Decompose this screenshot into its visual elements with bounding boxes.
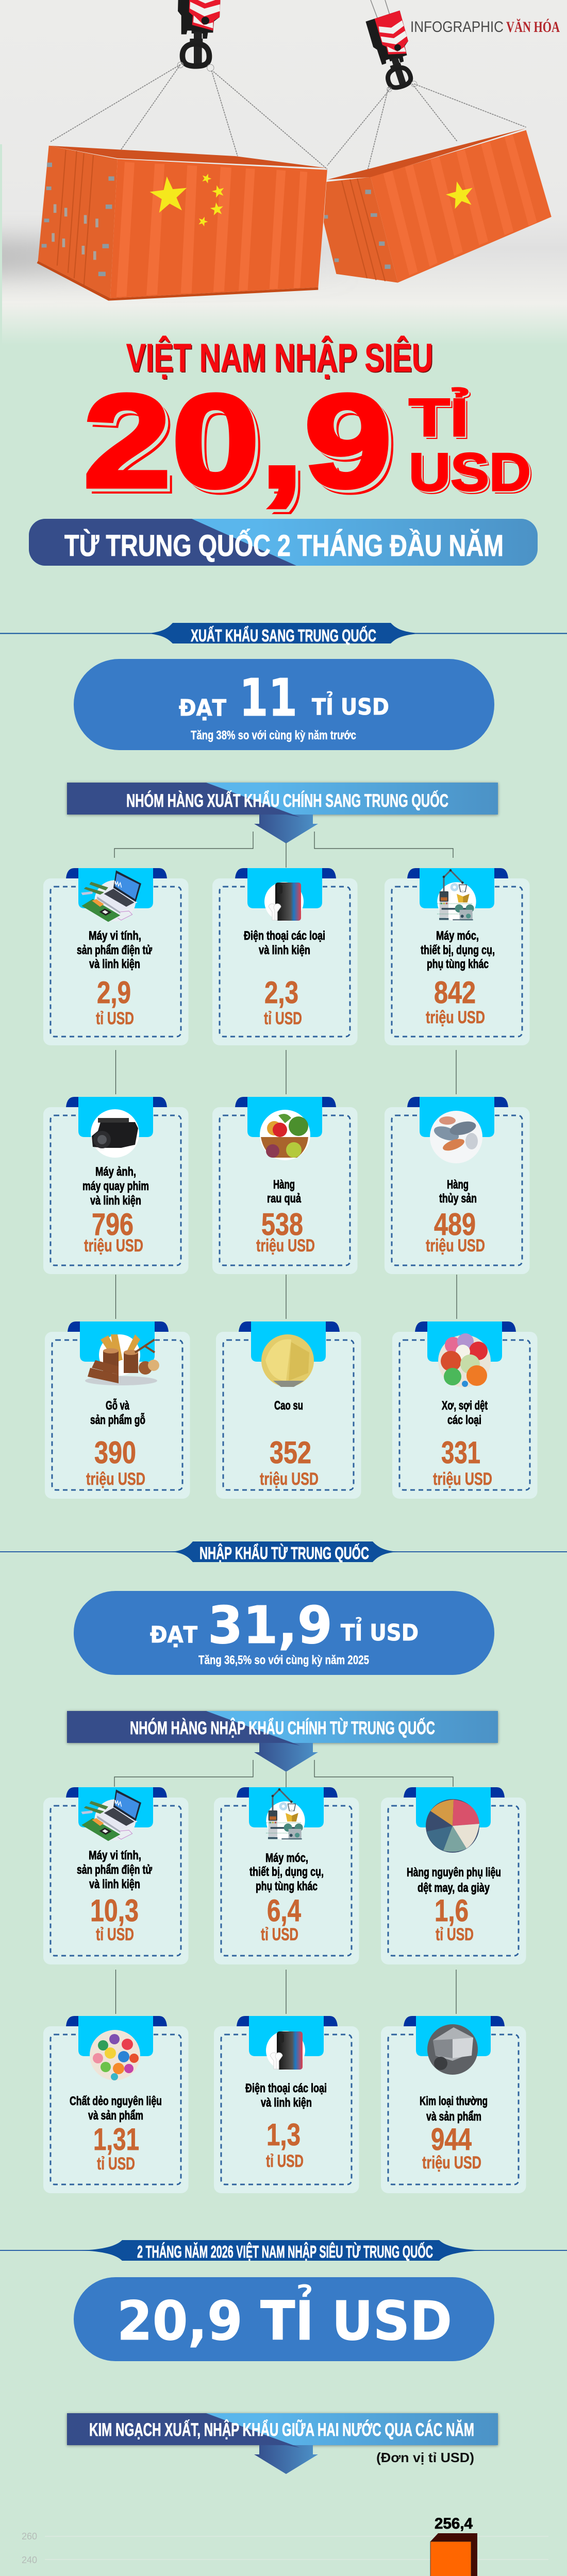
illustration: China flag container xyxy=(37,146,327,301)
connectors: export top xyxy=(114,832,457,1319)
card: computers: tỉ USD xyxy=(96,1009,134,1028)
card: machinery: 842 xyxy=(434,975,476,1010)
pill: import total: TỈ USD xyxy=(341,1617,419,1646)
card: cameras: máy quay phim xyxy=(82,1179,149,1193)
card: wood: triệu USD xyxy=(86,1469,145,1489)
card: textile fibre: 331 xyxy=(441,1435,480,1470)
icon: phone xyxy=(264,882,304,921)
card: vegetables and fruit xyxy=(212,1097,358,1274)
card: import phones: và linh kiện xyxy=(261,2096,312,2110)
card: import phones: Điện thoại các loại xyxy=(245,2081,327,2095)
card: computers xyxy=(43,868,189,1045)
card: import plastics: 1,31 xyxy=(93,2122,139,2157)
card: import textile materials: tỉ USD xyxy=(436,1925,474,1944)
bar chart: 260 xyxy=(22,2531,37,2541)
banner: subtitle xyxy=(29,519,538,566)
big unit TỈ USD: USD xyxy=(410,444,532,504)
card: seafood: Hàng xyxy=(447,1178,469,1192)
card: seafood: 489 xyxy=(434,1207,476,1242)
card: import metals: Kim loại thường xyxy=(420,2094,488,2108)
card: import computers: tỉ USD xyxy=(96,1925,134,1944)
card: computers: và linh kiện xyxy=(89,957,140,971)
card: import plastics xyxy=(43,2016,189,2193)
bar chart: 256,4 xyxy=(435,2515,473,2532)
icon: fruit basket xyxy=(260,1110,310,1160)
bar chart: 240 xyxy=(22,2555,37,2565)
icon: plastic beads xyxy=(90,2030,140,2080)
pill: export total: TỈ USD xyxy=(312,691,389,720)
card: import machinery xyxy=(214,1787,359,1964)
card: cameras: 796 xyxy=(92,1207,134,1242)
card: vegetables and fruit: rau quả xyxy=(267,1192,301,1206)
card: wood xyxy=(45,1321,190,1499)
card: phones: tỉ USD xyxy=(264,1009,302,1028)
card: vegetables and fruit: triệu USD xyxy=(256,1236,315,1256)
icon: wood logs xyxy=(85,1334,159,1385)
icon: yarn balls xyxy=(438,1333,491,1387)
pill: import total: 31,9 xyxy=(208,1595,332,1655)
card: textile fibre: triệu USD xyxy=(433,1469,492,1489)
card: rubber: Cao su xyxy=(274,1399,303,1413)
card: computers: sản phẩm điện tử xyxy=(77,943,152,957)
card: import metals: và sản phẩm xyxy=(426,2110,481,2124)
card: machinery: thiết bị, dụng cụ, xyxy=(421,943,495,957)
card: phones: và linh kiện xyxy=(259,943,310,957)
section header: trade deficit xyxy=(0,2240,567,2261)
card: machinery: triệu USD xyxy=(426,1008,485,1027)
section header: import xyxy=(0,1541,567,1563)
card: machinery: phụ tùng khác xyxy=(427,957,489,971)
card: import phones: tỉ USD xyxy=(266,2151,304,2171)
card: cameras: triệu USD xyxy=(84,1236,143,1256)
icon: machine xyxy=(266,1788,305,1840)
heading bar: import groups: NHÓM HÀNG NHẬP KHẨU CHÍNH TỪ TRUNG QUỐC xyxy=(130,1718,435,1738)
card: import plastics: Chất dẻo nguyên liệu xyxy=(70,2094,162,2108)
icon: metal bars xyxy=(427,2024,478,2075)
card: import phones: 1,3 xyxy=(266,2117,301,2152)
icon: laptop xyxy=(81,1789,141,1841)
card: phones: 2,3 xyxy=(264,975,298,1010)
card: import machinery: phụ tùng khác xyxy=(256,1879,318,1893)
big unit TỈ USD: TỈ xyxy=(409,387,469,448)
card: import plastics: tỉ USD xyxy=(97,2154,135,2174)
icon: video camera xyxy=(91,1109,139,1158)
card: seafood: triệu USD xyxy=(426,1236,485,1256)
card: import computers: và linh kiện xyxy=(89,1877,140,1891)
card: import machinery: 6,4 xyxy=(267,1893,301,1928)
card: import metals: triệu USD xyxy=(422,2153,481,2173)
card: machinery: Máy móc, xyxy=(436,929,479,943)
icon: rubber xyxy=(261,1334,314,1387)
card: wood: sản phẩm gỗ xyxy=(90,1413,145,1427)
big number 20,9: 20,9 xyxy=(83,366,392,515)
section header: export: XUẤT KHẨU SANG TRUNG QUỐC xyxy=(191,625,376,645)
card: rubber xyxy=(216,1321,361,1499)
pill: export total: 11 xyxy=(239,668,297,728)
heading bar: import groups xyxy=(67,1711,498,1772)
section header: export xyxy=(0,623,567,645)
card: import textile materials: Hàng nguyên phụ liệu xyxy=(407,1866,501,1879)
card: wood: 390 xyxy=(94,1435,136,1470)
card: machinery xyxy=(385,868,530,1045)
icon: phone xyxy=(266,2031,305,2070)
card: phones xyxy=(212,868,358,1045)
card: import metals: 944 xyxy=(431,2122,472,2157)
chart unit note: (Đơn vị tỉ USD) xyxy=(376,2450,474,2465)
big number 20,9: 20,9 xyxy=(88,371,397,520)
card: import machinery: thiết bị, dụng cụ, xyxy=(249,1865,324,1879)
card: import phones xyxy=(214,2016,359,2193)
pill: export total xyxy=(74,659,494,750)
card: import textile materials xyxy=(381,1787,526,1964)
card: import metals xyxy=(381,2016,526,2193)
card: computers: Máy vi tính, xyxy=(89,929,141,943)
section header: import: NHẬP KHẨU TỪ TRUNG QUỐC xyxy=(199,1543,369,1563)
big unit TỈ USD: USD xyxy=(411,445,533,505)
card: import computers xyxy=(43,1787,189,1964)
card: import textile materials: dệt may, da giày xyxy=(418,1881,490,1895)
heading bar: export groups xyxy=(67,783,498,843)
icon: lifting chains xyxy=(51,63,526,173)
icon: left crane hook xyxy=(177,0,221,71)
big unit TỈ USD: TỈ xyxy=(411,390,471,450)
card: cameras: Máy ảnh, xyxy=(95,1165,136,1179)
card: import machinery: tỉ USD xyxy=(261,1925,298,1944)
logo top: INFOGRAPHIC xyxy=(410,19,504,36)
icon: right crane hook xyxy=(365,0,424,95)
big unit TỈ USD xyxy=(409,387,533,505)
title line: VIỆT NAM NHẬP SIÊU xyxy=(127,336,434,381)
pill: export total: Tăng 38% so với cùng kỳ năm trước xyxy=(191,728,356,742)
pill: import total: Tăng 36,5% so với cùng kỳ năm 2025 xyxy=(198,1653,369,1667)
pill: trade deficit xyxy=(74,2277,494,2361)
connectors: import xyxy=(114,1760,456,2014)
big unit TỈ USD: TỈ xyxy=(410,389,470,449)
card: cameras: và linh kiện xyxy=(90,1194,141,1208)
card: computers: 2,9 xyxy=(97,975,131,1010)
card: import textile materials: 1,6 xyxy=(435,1893,469,1928)
big unit TỈ USD: USD xyxy=(409,443,531,502)
card: import computers: 10,3 xyxy=(90,1893,139,1928)
icon: machine xyxy=(437,869,476,921)
card: seafood: thủy sản xyxy=(439,1192,477,1206)
card: textile fibre: Xơ, sợi dệt xyxy=(442,1399,488,1413)
card: wood: Gỗ và xyxy=(106,1398,129,1413)
card: seafood xyxy=(385,1097,530,1274)
heading bar: chart xyxy=(67,2413,498,2474)
icon: laptop xyxy=(81,870,141,922)
card: vegetables and fruit: Hàng xyxy=(273,1178,295,1192)
bar chart xyxy=(22,2515,554,2576)
card: cameras xyxy=(43,1097,189,1274)
card: textile fibre xyxy=(392,1321,537,1499)
title line: VIỆT NAM NHẬP SIÊU xyxy=(126,335,433,380)
hero photo backdrop xyxy=(0,0,567,345)
card: rubber: 352 xyxy=(270,1435,311,1470)
card: textile fibre: các loại xyxy=(447,1413,481,1427)
card: vegetables and fruit: 538 xyxy=(261,1207,303,1242)
card: phones: Điện thoại các loại xyxy=(244,929,325,943)
card: import machinery: Máy móc, xyxy=(265,1851,308,1865)
card: rubber: triệu USD xyxy=(260,1469,319,1489)
big number 20,9: 20,9 xyxy=(86,369,395,518)
pill: trade deficit: 20,9 TỈ USD xyxy=(117,2284,452,2352)
pill: import total: ĐẠT xyxy=(150,1622,197,1648)
icon: seafood xyxy=(430,1111,482,1163)
icon: fabric swatches xyxy=(426,1799,479,1853)
pill: import total xyxy=(74,1591,494,1675)
card: import computers: Máy vi tính, xyxy=(89,1849,141,1862)
card: import plastics: và sản phẩm xyxy=(88,2109,143,2123)
illustration: Vietnam flag container xyxy=(324,128,552,283)
card: import computers: sản phẩm điện tử xyxy=(77,1863,152,1877)
pill: export total: ĐẠT xyxy=(179,695,226,721)
